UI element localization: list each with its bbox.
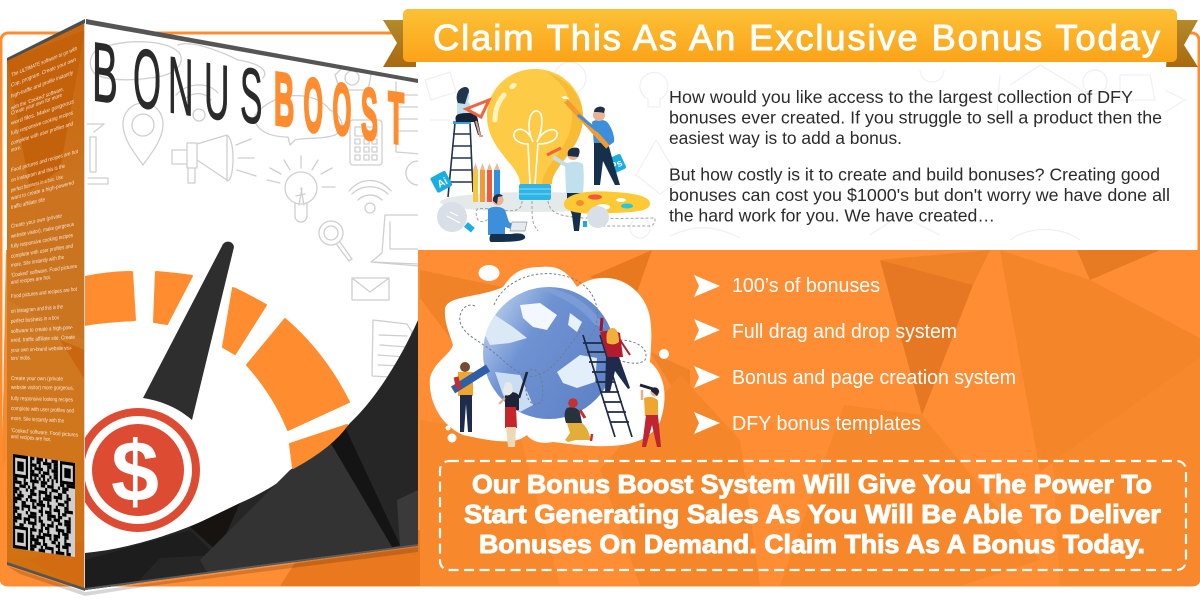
- side panel small print: complete with user profiles and: [11, 406, 74, 415]
- illustration: globe team: [430, 265, 669, 447]
- QR code: [13, 454, 75, 557]
- side panel small print: [10, 46, 78, 443]
- text block: intro paragraphs: How would you like access to the largest collection of DFY: [669, 87, 1134, 107]
- ribbon tail: left: [383, 20, 416, 67]
- laptop: [371, 215, 418, 266]
- logo: BONUS: S: [240, 50, 262, 141]
- bullet arrows: [694, 275, 720, 434]
- side edge highlight: [84, 22, 86, 590]
- text block: intro paragraphs: [669, 87, 1170, 226]
- faint doodles: [425, 62, 1185, 240]
- side panel small print: tors' mobs.: [11, 355, 31, 362]
- logo: BOOST: B: [274, 58, 294, 144]
- map pin: [123, 103, 163, 165]
- logo: BOOST: T: [388, 76, 404, 160]
- side panel small print: Create your own (private: [11, 376, 63, 383]
- logo: BOOST: [275, 71, 404, 145]
- dark swoosh: [85, 320, 418, 590]
- ladder: [448, 121, 473, 197]
- icon: Ps tile: [605, 153, 627, 175]
- side panel small print: 'Cooked' software. Food pictures: [11, 428, 78, 439]
- ribbon tail: right: [1166, 20, 1198, 67]
- seated person: [488, 194, 527, 242]
- side panel small print: more. Site instantly with the: [11, 255, 64, 269]
- side panel small print: complete with user profiles and: [11, 121, 73, 147]
- icon: Ps tile: Ps: [609, 158, 625, 173]
- side panel small print: Food pictures and recipes are hot: [11, 287, 77, 300]
- side panel small print: 'Cooked' software. Food pictures: [11, 264, 77, 279]
- logo: BOOST: O: [332, 67, 351, 152]
- side panel small print: fully responsive cooking recipes: [11, 110, 73, 137]
- panel: orange polygon background: [0, 250, 1200, 586]
- side panel small print: word files. Make gorgeous: [10, 99, 74, 127]
- side panel small print: The ULTIMATE software to go with: [11, 46, 77, 79]
- side panel small print: ered, traffic affiliate site. Create: [11, 335, 75, 344]
- callout text: [464, 469, 1161, 559]
- side panel small print: and recipes are hot.: [11, 434, 51, 443]
- speech cloud behind logo: [90, 42, 181, 80]
- box lower edge: [85, 544, 418, 592]
- side panel small print: Create your own for more: [11, 93, 62, 117]
- grey bulb right: [583, 206, 609, 228]
- callout text: Start Generating Sales As You Will Be Able To Deliver: [464, 499, 1161, 529]
- paint palette: [564, 191, 650, 214]
- side panel small print: Cop, program. Create your own: [11, 57, 76, 89]
- side panel small print: website visitor), make gorgeous: [10, 222, 74, 240]
- desk / blueprint at edge: [87, 124, 108, 184]
- side panel small print: software to create a high-pow-: [11, 325, 73, 335]
- doodle icons: [87, 42, 430, 378]
- person climbing ladder: [600, 318, 630, 392]
- callout: dashed box: [440, 461, 1186, 570]
- floor shadow: [440, 192, 630, 212]
- megaphone: [172, 135, 256, 183]
- text block: intro paragraphs: the hard work for you. We have created…: [669, 206, 995, 226]
- person with telescope: [640, 385, 661, 447]
- banner title: Claim This As An Exclusive Bonus Today: [433, 17, 1161, 58]
- side panel small print: high-traffic and profile instantly: [11, 70, 73, 100]
- side panel small print: website visitor) more gorgeous,: [10, 385, 74, 392]
- logo: BONUS: [94, 42, 262, 124]
- envelope: [352, 278, 389, 300]
- icon: AI tile: [430, 170, 453, 193]
- person with big pencil: [561, 96, 620, 185]
- person kneeling: [565, 398, 592, 442]
- illustration: light bulb team: [430, 69, 655, 242]
- magnifier: [319, 221, 343, 245]
- icon: AI tile: Ai: [436, 176, 450, 191]
- product box: side face: [7, 19, 86, 591]
- bullet labels: Bonus and page creation system: [732, 367, 1016, 389]
- text block: intro paragraphs: But how costly is it to create and build bonuses? Creating good: [669, 164, 1160, 184]
- side panel small print: your own on-brand website visi-: [11, 346, 72, 354]
- side panel small print: on Instagram and this is the: [11, 163, 65, 184]
- logo: BOOST: O: [304, 63, 323, 150]
- logo: BONUS: B: [92, 24, 118, 122]
- side panel small print: fully responsive looking recipes: [11, 396, 73, 404]
- side bottom edge: [7, 562, 85, 591]
- person reaching: [499, 372, 527, 447]
- globe: [483, 287, 615, 419]
- side panel small print: more.: [11, 145, 21, 154]
- text block: intro paragraphs: easiest way is to add a bonus.: [669, 128, 902, 148]
- side panel small print: perfect business in a box. Use: [11, 175, 63, 194]
- person with pencil: [445, 362, 488, 432]
- bullet labels: 100’s of bonuses: [732, 275, 880, 297]
- ladder: [583, 335, 632, 437]
- bulb: [487, 69, 583, 184]
- pencils: [473, 163, 500, 202]
- bullet list: [694, 275, 1016, 435]
- side panel small print: perfect business in a box: [11, 315, 59, 325]
- calculator: [350, 120, 382, 165]
- text block: intro paragraphs: bonuses can cost you $1000's but don't worry we have done all: [669, 185, 1170, 205]
- person on ladder: [456, 87, 489, 136]
- panel: white text panel: [416, 62, 1197, 250]
- dashed cables: [476, 201, 655, 231]
- side panel small print: Create your own (private: [11, 213, 62, 230]
- light bulb: [285, 172, 317, 204]
- banner: [403, 9, 1177, 62]
- gauge segments: [85, 272, 349, 468]
- side panel small print: traffic affiliate site: [11, 197, 45, 211]
- blob dots: [446, 265, 669, 442]
- gear: [345, 71, 359, 85]
- side panel small print: want to create a high-powered: [10, 180, 74, 202]
- bullet labels: [732, 275, 1016, 435]
- callout text: Bonuses On Demand. Claim This As A Bonus Today.: [479, 529, 1145, 559]
- person at centre with ruler: [547, 148, 584, 231]
- bulb socket: [519, 184, 551, 200]
- side panel small print: complete with user profiles and: [11, 243, 73, 260]
- side panel small print: Food pictures and recipes are hot: [11, 149, 78, 174]
- logo: BONUS: N: [168, 41, 193, 134]
- icon: dollar badge: $: [111, 424, 159, 520]
- product box: front face: [76, 20, 430, 592]
- wifi: [365, 203, 375, 213]
- side panel small print: on Instagram and this is the: [11, 304, 63, 315]
- side panel small print: more. Site instantly with the: [11, 416, 64, 425]
- icon: dollar badge: [76, 408, 200, 532]
- box top edge: [86, 19, 418, 83]
- logo: BONUS: O: [133, 29, 161, 128]
- text block: intro paragraphs: bonuses ever created. If you struggle to sell a product then the: [669, 108, 1162, 128]
- side top edge: [7, 19, 85, 61]
- white blob: [430, 267, 665, 446]
- side panel small print: with the 'Cooked' software.: [10, 86, 64, 112]
- bullet labels: DFY bonus templates: [732, 413, 921, 435]
- clipboard: [396, 82, 421, 154]
- logo: BONUS: U: [204, 46, 229, 138]
- document: [372, 320, 412, 378]
- box shadow: [7, 547, 418, 596]
- callout text: Our Bonus Boost System Will Give You The Power To: [472, 469, 1152, 499]
- needle: [143, 242, 234, 420]
- side panel small print: fully responsive cooking recipes: [11, 233, 73, 250]
- bullet labels: Full drag and drop system: [732, 321, 957, 343]
- logo: BOOST: S: [361, 73, 378, 157]
- dashed orbit lines: [460, 274, 646, 404]
- grey bulb left: [437, 202, 475, 233]
- side panel small print: and recipes are hot.: [11, 275, 51, 286]
